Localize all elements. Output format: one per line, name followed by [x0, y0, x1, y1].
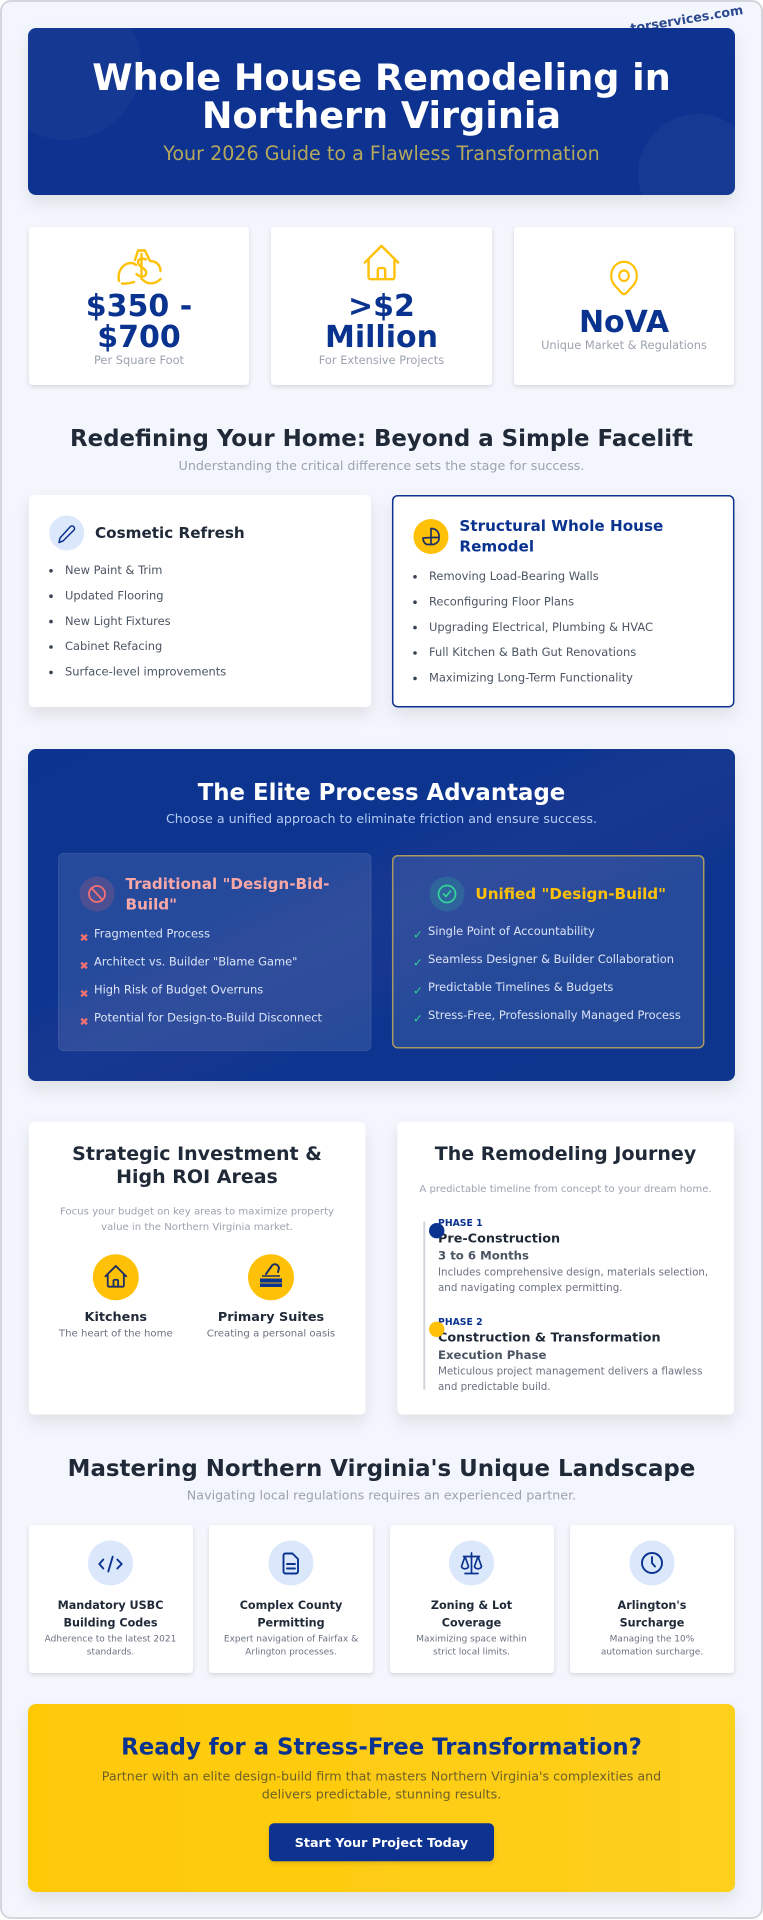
benefit list: Single Point of Accountability — [428, 924, 595, 938]
panel: unified design-build — [393, 856, 704, 1048]
description: Focus your budget on key areas to maximize property — [60, 1206, 334, 1218]
CTA heading: Ready for a Stress-Free Transformation? — [121, 1734, 642, 1760]
panel: traditional design-bid-build — [58, 854, 371, 1050]
icon: check circle — [430, 876, 464, 912]
section heading: redefining: Redefining Your Home: Beyond a Simple Facelift — [70, 426, 693, 452]
section heading: landscape — [68, 1456, 695, 1502]
bullet list: Cabinet Refacing — [65, 639, 162, 653]
heading: High ROI Areas — [116, 1166, 278, 1188]
heading: The Remodeling Journey — [435, 1143, 697, 1165]
benefit list: Stress-Free, Professionally Managed Process — [428, 1008, 681, 1022]
card title: Unified "Design-Build" — [475, 885, 666, 903]
watermark: torservices.com — [629, 2, 744, 36]
stat card: NoVA — [514, 227, 734, 385]
section heading: landscape: Navigating local regulations requires an experienced partner. — [187, 1488, 576, 1502]
card: USBC codes: standards. — [87, 1647, 134, 1657]
timeline — [423, 1218, 708, 1393]
bullet list: Updated Flooring — [65, 588, 163, 602]
bullet list: Surface-level improvements — [65, 665, 226, 679]
card: surcharge: Surcharge — [620, 1617, 685, 1630]
drawback list: ✖ — [80, 932, 89, 944]
drawback list: Fragmented Process — [94, 926, 210, 940]
bullet list — [49, 563, 226, 679]
CTA button: Start Your Project Today — [295, 1835, 469, 1850]
phase 2: Construction & Transformation — [438, 1330, 661, 1346]
stat label: For Extensive Projects — [319, 353, 444, 367]
subheading: Choose a unified approach to eliminate friction and ensure success. — [166, 811, 597, 826]
card: USBC codes: Adherence to the latest 2021 — [45, 1634, 176, 1644]
phase 1: Pre-Construction — [438, 1231, 560, 1246]
benefit list: ✓ — [413, 984, 423, 998]
bullet list — [413, 569, 653, 685]
drawback list: ✖ — [80, 960, 89, 972]
section heading: redefining: Understanding the critical difference sets the stage for success. — [179, 458, 584, 473]
phase 1: and navigating complex permitting. — [438, 1282, 623, 1294]
bullet list: Full Kitchen & Bath Gut Renovations — [429, 645, 636, 659]
drawback list: ✖ — [80, 988, 89, 1000]
drawback list: Architect vs. Builder "Blame Game" — [94, 954, 297, 968]
card title: Build" — [126, 895, 177, 913]
benefit list: ✓ — [413, 928, 423, 942]
card: county permitting: Permitting — [257, 1617, 325, 1630]
icon: clock — [630, 1540, 674, 1586]
card: zoning: Coverage — [442, 1617, 502, 1630]
stat value: Million — [325, 320, 438, 355]
bullet list: Upgrading Electrical, Plumbing & HVAC — [429, 620, 653, 634]
phase 1: PHASE 1 — [438, 1218, 483, 1229]
card: surcharge: automation surcharge. — [601, 1647, 703, 1657]
description: A predictable timeline from concept to your dream home. — [419, 1184, 712, 1195]
bullet list: Removing Load-Bearing Walls — [429, 569, 599, 583]
phase 1 — [429, 1218, 708, 1294]
phase 2: and predictable build. — [438, 1381, 551, 1393]
bullet list: Maximizing Long-Term Functionality — [429, 671, 633, 685]
section heading: landscape: Mastering Northern Virginia's Unique Landscape — [68, 1456, 695, 1482]
card: surcharge: Arlington's — [618, 1599, 687, 1612]
stat card: cost per square foot — [29, 227, 249, 385]
CTA description: delivers predictable, stunning results. — [262, 1786, 501, 1802]
stat value: >$2 — [348, 289, 415, 324]
panel: cosmetic refresh — [29, 495, 371, 707]
stat label: Per Square Foot — [94, 353, 185, 367]
card: zoning: Zoning & Lot — [431, 1599, 513, 1612]
card: surcharge: Managing the 10% — [610, 1634, 695, 1644]
stat value: $350 - — [86, 289, 192, 324]
phase 2: Meticulous project management delivers a flawless — [438, 1366, 703, 1378]
heading: The Elite Process Advantage — [198, 780, 565, 806]
phase 1: 3 to 6 Months — [438, 1248, 529, 1262]
call to action panel — [28, 1704, 735, 1892]
header banner — [26, 28, 738, 206]
stat value: NoVA — [579, 305, 670, 340]
stat value: $700 — [97, 320, 181, 355]
panel: strategic investment — [29, 1122, 366, 1414]
section heading: redefining — [70, 426, 693, 473]
item: kitchens: The heart of the home — [58, 1328, 173, 1340]
icon: map pin — [611, 262, 637, 294]
CTA button — [269, 1823, 494, 1861]
phase 2: PHASE 2 — [438, 1317, 483, 1328]
item: kitchens: Kitchens — [85, 1310, 147, 1325]
benefit list — [413, 924, 681, 1026]
benefit list: ✓ — [413, 956, 423, 970]
bullet list: New Paint & Trim — [65, 563, 162, 577]
item: primary suites — [207, 1254, 335, 1340]
title: Northern Virginia — [202, 94, 561, 137]
bullet list: Reconfiguring Floor Plans — [429, 594, 574, 608]
card title: Structural Whole House — [459, 517, 663, 535]
card: zoning: Maximizing space within — [416, 1634, 527, 1644]
card title: Cosmetic Refresh — [95, 524, 245, 542]
card: county permitting: Arlington processes. — [245, 1647, 337, 1657]
drawback list — [80, 926, 323, 1028]
description: value in the Northern Virginia market. — [101, 1222, 293, 1233]
title: Whole House Remodeling in — [92, 56, 671, 99]
icon: document — [268, 1540, 314, 1586]
card: county permitting — [209, 1525, 373, 1673]
panel: structural remodel — [393, 496, 734, 707]
benefit list: Predictable Timelines & Budgets — [428, 980, 613, 994]
drawback list: High Risk of Budget Overruns — [94, 982, 263, 996]
icon: house — [365, 246, 398, 279]
card: USBC codes: Building Codes — [63, 1617, 158, 1630]
drawback list: ✖ — [80, 1016, 89, 1028]
stat label: Unique Market & Regulations — [541, 338, 707, 352]
stat card: project cost — [271, 227, 492, 385]
icon: prohibited — [80, 876, 114, 912]
bullet list: New Light Fixtures — [65, 614, 171, 628]
heading: Strategic Investment & — [72, 1143, 322, 1165]
card: zoning: strict local limits. — [433, 1647, 510, 1657]
phase 2: Execution Phase — [438, 1348, 546, 1362]
panel: remodeling journey — [398, 1122, 734, 1414]
card title: Traditional "Design-Bid- — [126, 875, 329, 893]
card title: Remodel — [459, 537, 534, 555]
icon: structural — [414, 519, 448, 554]
card: USBC codes: Mandatory USBC — [58, 1599, 163, 1612]
CTA description: Partner with an elite design-build firm that masters Northern Virginia's complexities and — [102, 1768, 661, 1784]
card: zoning — [390, 1525, 554, 1673]
icon: code — [88, 1540, 133, 1586]
panel: elite process advantage — [28, 749, 735, 1081]
item: primary suites: Creating a personal oasis — [207, 1328, 335, 1340]
card: county permitting: Complex County — [240, 1599, 343, 1612]
icon: kitchen house — [105, 1266, 126, 1287]
icon: dollar — [119, 250, 160, 284]
item: primary suites: Primary Suites — [218, 1310, 325, 1325]
card: USBC codes — [29, 1525, 193, 1673]
phase 1: Includes comprehensive design, materials selection, — [438, 1267, 708, 1279]
benefit list: Seamless Designer & Builder Collaboration — [428, 952, 674, 966]
card: county permitting: Expert navigation of Fairfax & — [224, 1634, 358, 1644]
icon: bed — [260, 1264, 282, 1287]
card: surcharge — [570, 1525, 734, 1673]
icon: scales — [449, 1540, 494, 1586]
icon: pencil — [49, 516, 84, 550]
subtitle: Your 2026 Guide to a Flawless Transformation — [162, 142, 600, 165]
drawback list: Potential for Design-to-Build Disconnect — [94, 1010, 323, 1024]
benefit list: ✓ — [413, 1012, 423, 1026]
item: kitchens — [58, 1254, 173, 1340]
phase 2 — [429, 1317, 703, 1393]
